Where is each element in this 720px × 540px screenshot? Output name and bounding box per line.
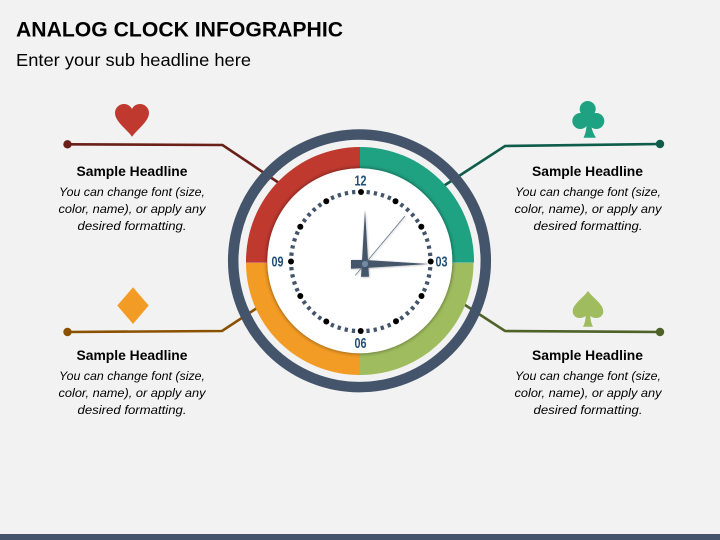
text block: bottom right: You can change font (size, (515, 369, 661, 383)
text block: top right: You can change font (size, (515, 185, 661, 199)
text block: bottom left: color, name), or apply any (58, 386, 206, 400)
hour hand (351, 260, 429, 269)
connector: bottom right (462, 303, 664, 336)
text block: bottom left: You can change font (size, (59, 369, 205, 383)
icon: heart (115, 104, 149, 137)
hour dots (288, 189, 434, 334)
minute tick marks (291, 192, 430, 331)
text block: bottom right (514, 348, 662, 417)
text block: top right: Sample Headline (532, 164, 643, 179)
clock (233, 134, 486, 387)
text block: top left (58, 164, 206, 233)
clock face (267, 168, 452, 353)
icon: club (572, 101, 604, 138)
text block: top right (514, 164, 662, 233)
text block: bottom right: Sample Headline (532, 348, 643, 363)
hub (362, 261, 368, 267)
text block: bottom left (58, 348, 206, 417)
text block: top left: color, name), or apply any (58, 202, 206, 216)
text block: bottom right: color, name), or apply any (514, 386, 662, 400)
icon: diamond (117, 287, 149, 324)
text block: top right: color, name), or apply any (514, 202, 662, 216)
clock numerals: 09 (272, 253, 284, 270)
segment: orange (246, 263, 360, 375)
text block: top left: Sample Headline (76, 164, 188, 179)
connector: top right (442, 140, 664, 187)
clock numerals: 12 (354, 173, 366, 190)
text block: bottom right: desired formatting. (534, 403, 642, 417)
title: ANALOG CLOCK INFOGRAPHIC (16, 18, 343, 42)
text block: bottom left: Sample Headline (76, 348, 188, 363)
connector: bottom left (63, 306, 260, 336)
text block: top right: desired formatting. (534, 219, 642, 233)
segment: teal (360, 147, 474, 261)
clock hands (351, 210, 429, 277)
text block: top left: You can change font (size, (59, 185, 205, 199)
second hand (355, 216, 405, 275)
minute hand (361, 210, 369, 277)
clock numerals: 06 (354, 335, 366, 352)
connector: top left (63, 140, 282, 185)
icon: spade (573, 291, 603, 327)
segment: green (360, 263, 474, 375)
text block: bottom left: desired formatting. (78, 403, 186, 417)
outer ring (233, 134, 486, 387)
clock numerals: 03 (436, 253, 448, 270)
segment: red (246, 147, 360, 261)
bottom bar (0, 534, 720, 540)
subtitle: Enter your sub headline here (16, 50, 251, 70)
clock numerals (272, 173, 448, 352)
text block: top left: desired formatting. (78, 219, 186, 233)
